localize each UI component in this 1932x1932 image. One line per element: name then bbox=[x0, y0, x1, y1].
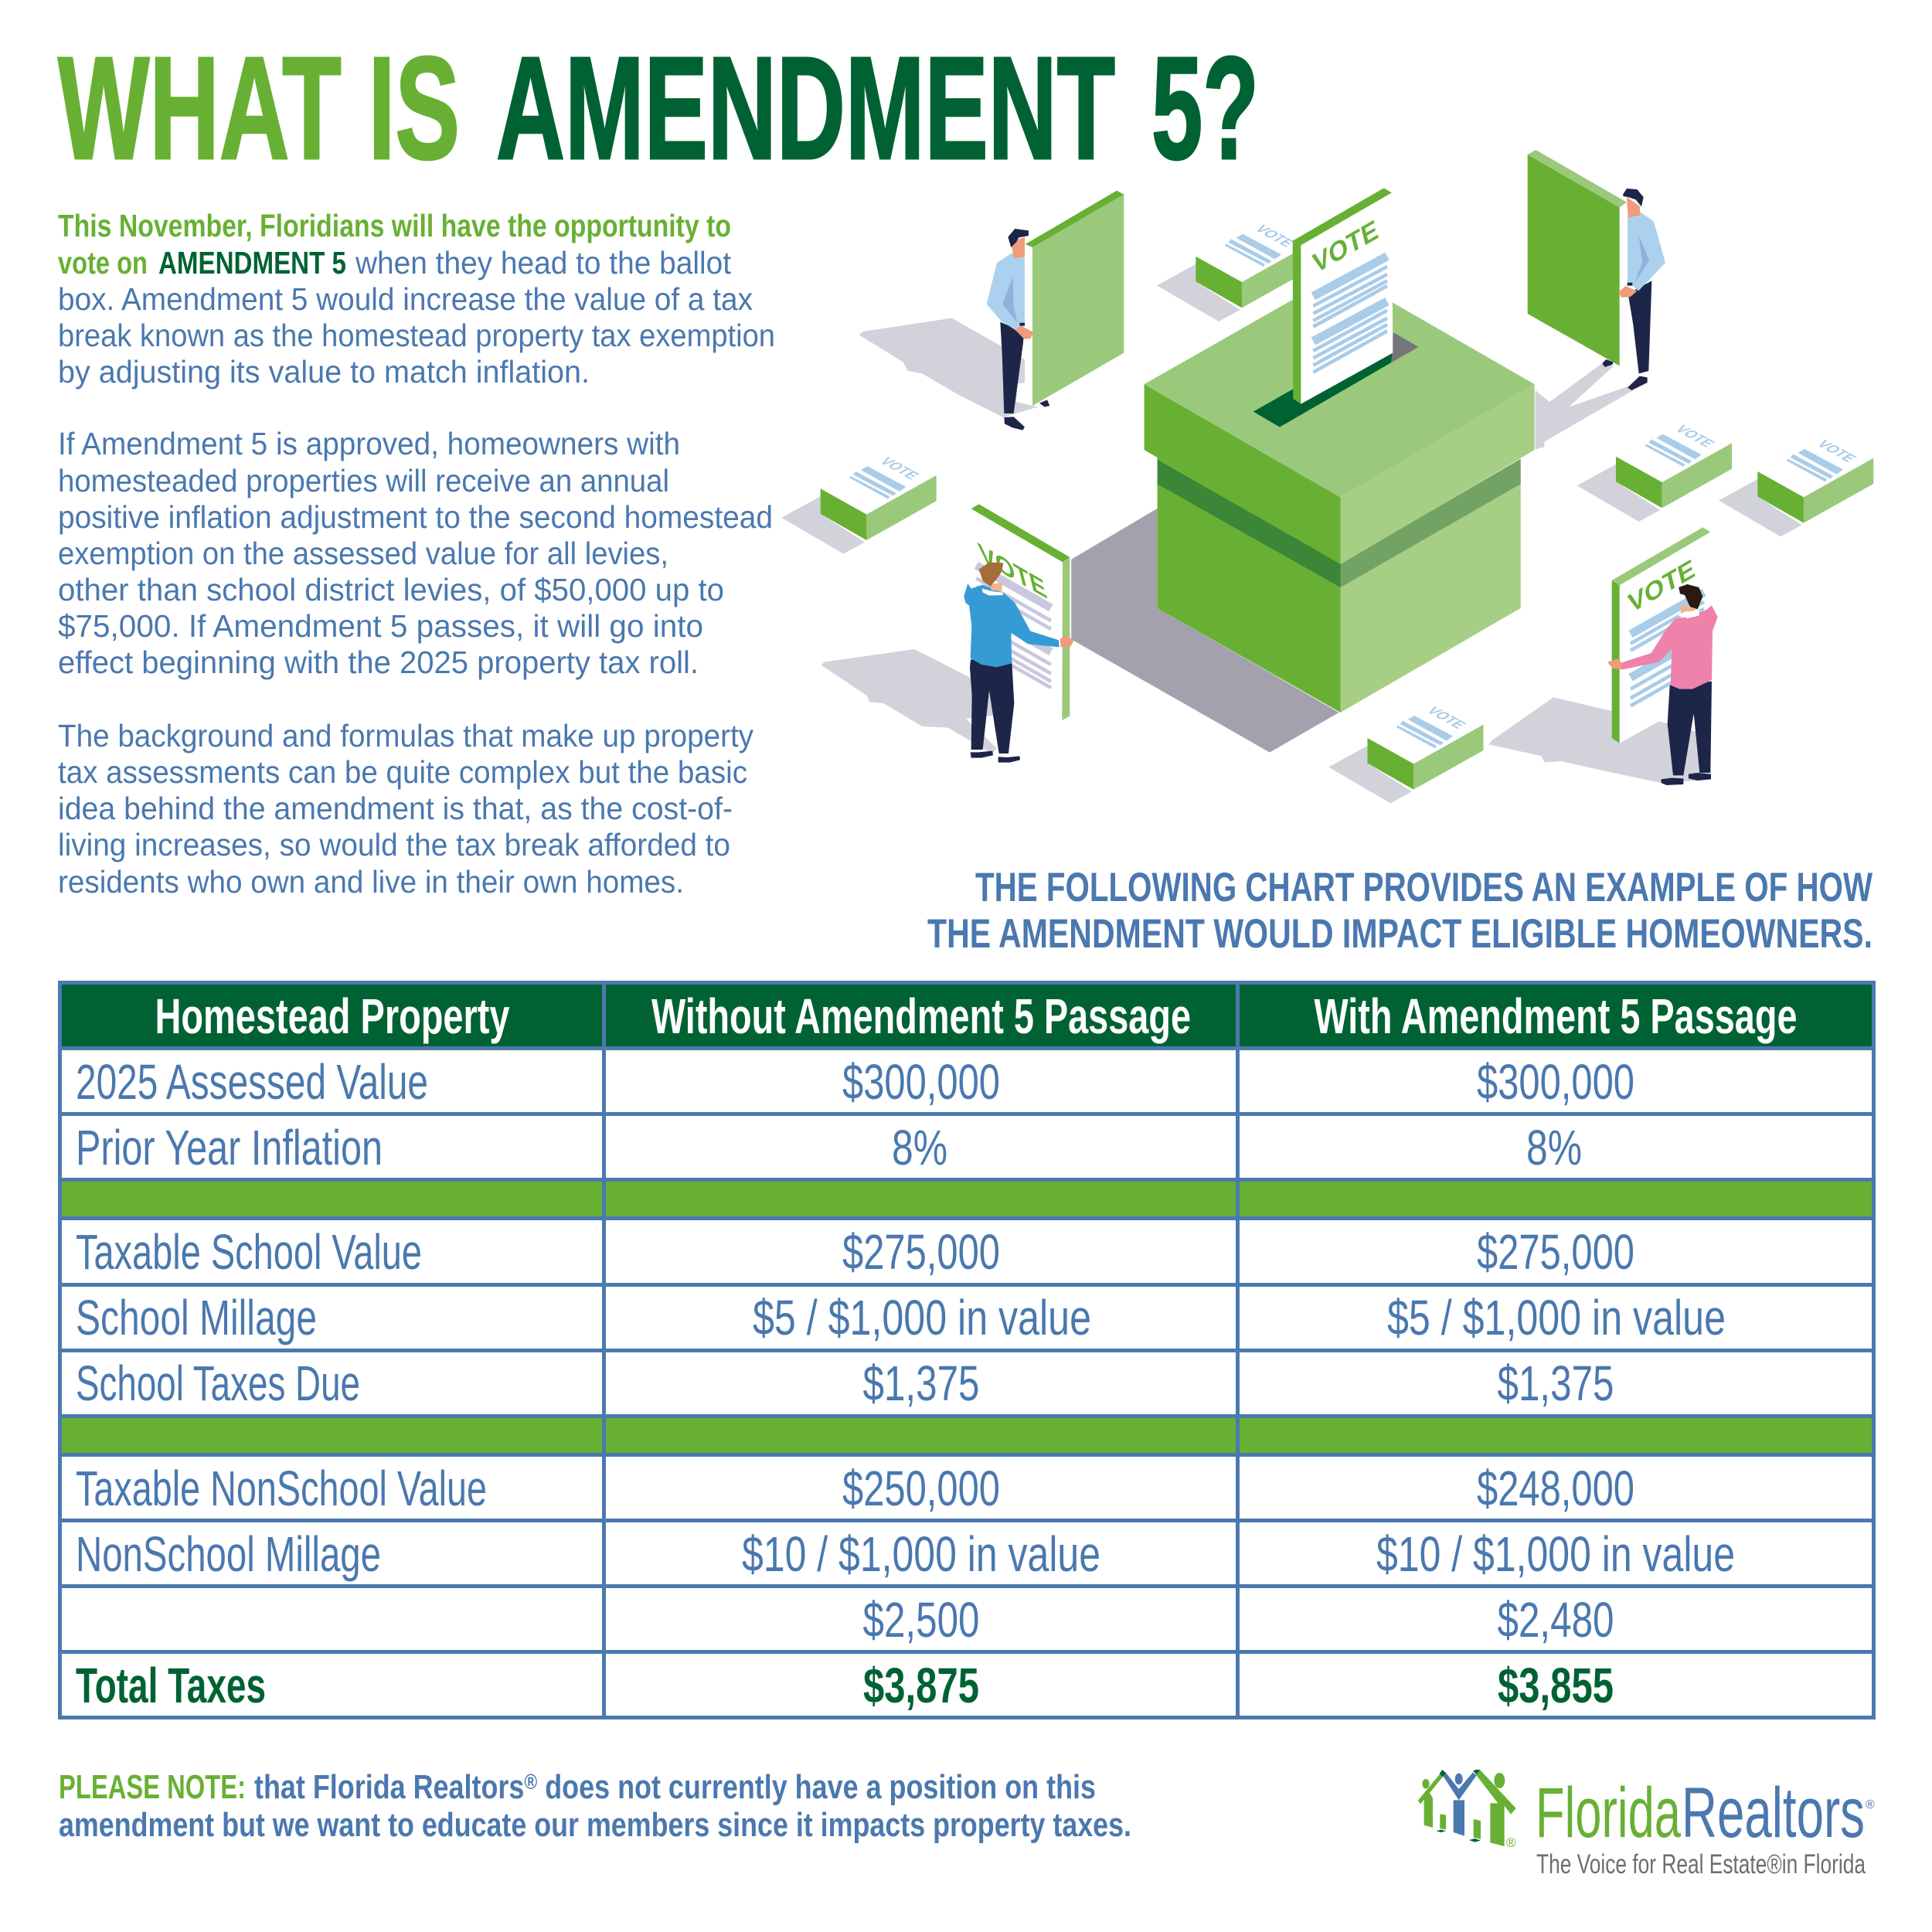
text block: second paragraph: homesteaded properties will receive an annual bbox=[58, 463, 669, 498]
title: AMENDMENT bbox=[496, 27, 1115, 190]
ballot stack, right 1 bbox=[1577, 417, 1732, 522]
footer note: ® bbox=[524, 1770, 538, 1794]
text block: intro paragraph bbox=[58, 208, 775, 389]
footer note bbox=[59, 1768, 1131, 1844]
table grid lines bbox=[58, 981, 1876, 1719]
text block: intro paragraph: break known as the homestead property tax exemption bbox=[58, 318, 775, 353]
row: nonschool taxes: $2,480 bbox=[1498, 1592, 1614, 1648]
title bbox=[58, 27, 1259, 190]
logo icon: houses and people bbox=[1418, 1770, 1516, 1846]
text block: intro paragraph: This November, Floridians will have the opportunity to bbox=[58, 208, 731, 243]
text block: second paragraph: exemption on the assessed value for all levies, bbox=[58, 536, 668, 571]
ballot paper entering slot bbox=[1253, 188, 1419, 427]
ballot stack, left bbox=[781, 450, 937, 554]
row: 2025 assessed value: $300,000 bbox=[842, 1054, 1000, 1110]
row: taxable nonschool value bbox=[76, 1461, 1634, 1516]
text block: intro paragraph: when they head to the ballot bbox=[355, 245, 732, 281]
row: nonschool millage bbox=[76, 1526, 1735, 1582]
logo wordmark: Florida bbox=[1536, 1774, 1682, 1852]
row: school millage: $5 / $1,000 in value bbox=[1387, 1290, 1726, 1345]
person with blank ballot, top right bbox=[1528, 150, 1665, 390]
row: school millage: $5 / $1,000 in value bbox=[753, 1290, 1091, 1345]
row: taxable school value: $275,000 bbox=[1477, 1224, 1634, 1280]
title: 5? bbox=[1151, 27, 1259, 190]
text block: intro paragraph: AMENDMENT 5 bbox=[158, 245, 346, 281]
row: taxable nonschool value: $250,000 bbox=[842, 1461, 1000, 1516]
row: total taxes: $3,855 bbox=[1498, 1658, 1614, 1713]
text block: second paragraph: effect beginning with the 2025 property tax roll. bbox=[58, 645, 699, 680]
ballot stack, top centre: VOTE bbox=[1251, 223, 1298, 250]
logo: Florida Realtors bbox=[1418, 1770, 1875, 1879]
ballot stack, right 1: VOTE bbox=[1671, 423, 1718, 450]
text block: third paragraph: idea behind the amendment is that, as the cost-of- bbox=[58, 791, 733, 826]
text block: third paragraph bbox=[58, 718, 753, 900]
ballot paper entering slot: VOTE bbox=[1310, 214, 1381, 280]
ballot stack, bottom bbox=[1328, 699, 1483, 803]
heading: chart intro bbox=[927, 865, 1872, 957]
text block: intro paragraph: by adjusting its value to match inflation. bbox=[58, 354, 590, 389]
illustration: voting scene bbox=[781, 150, 1873, 803]
row: nonschool millage: $10 / $1,000 in value bbox=[742, 1526, 1100, 1582]
text block: second paragraph: $75,000. If Amendment 5 passes, it will go into bbox=[58, 608, 703, 644]
row: school millage: School Millage bbox=[76, 1290, 317, 1345]
row: taxable school value: $275,000 bbox=[842, 1224, 1000, 1280]
table header row: Without Amendment 5 Passage bbox=[651, 988, 1191, 1044]
row: prior year inflation: Prior Year Inflation bbox=[76, 1120, 383, 1175]
logo icon registered mark: ® bbox=[1506, 1835, 1516, 1850]
text block: intro paragraph: vote on bbox=[58, 245, 148, 281]
ballot box floor shadow bbox=[1071, 509, 1339, 753]
person with blank ballot, top left bbox=[859, 191, 1124, 430]
person reading ballot in blue shirt: VOTE bbox=[975, 537, 1050, 605]
ballot box bbox=[1145, 273, 1535, 713]
row: total taxes bbox=[76, 1658, 1614, 1713]
row: taxable school value bbox=[76, 1224, 1634, 1280]
text block: third paragraph: living increases, so would the tax break afforded to bbox=[58, 827, 730, 862]
text block: third paragraph: tax assessments can be quite complex but the basic bbox=[58, 754, 747, 790]
row: total taxes: Total Taxes bbox=[76, 1658, 266, 1713]
ballot stack, left: VOTE bbox=[876, 455, 923, 481]
row: nonschool taxes bbox=[862, 1592, 1614, 1648]
ballot stack, bottom: VOTE bbox=[1423, 705, 1470, 731]
row: nonschool taxes: $2,500 bbox=[862, 1592, 980, 1648]
text block: second paragraph: other than school district levies, of $50,000 up to bbox=[58, 572, 724, 607]
row: school taxes due: $1,375 bbox=[1498, 1355, 1614, 1411]
row: school taxes due bbox=[76, 1355, 1614, 1411]
ballot stack, right 2: VOTE bbox=[1813, 438, 1859, 464]
person top right: floor shadow bbox=[1536, 363, 1633, 450]
row: school taxes due: $1,375 bbox=[862, 1355, 980, 1411]
text block: second paragraph: positive inflation adjustment to the second homestead bbox=[58, 499, 773, 535]
person reading ballot in blue shirt bbox=[821, 504, 1074, 763]
text block: third paragraph: The background and formulas that make up property bbox=[58, 718, 753, 753]
table header row: Homestead Property bbox=[155, 988, 510, 1044]
row: nonschool millage: NonSchool Millage bbox=[76, 1526, 381, 1582]
green divider row 1 bbox=[58, 1180, 1876, 1219]
ballot stack, top centre bbox=[1157, 217, 1311, 321]
ballot stack, right 2 bbox=[1719, 432, 1873, 536]
footer note: that Florida Realtors bbox=[254, 1768, 585, 1806]
row: taxable nonschool value: $248,000 bbox=[1477, 1461, 1634, 1516]
row: prior year inflation bbox=[76, 1120, 1582, 1175]
green divider row 2 bbox=[58, 1416, 1876, 1454]
row: 2025 assessed value: 2025 Assessed Value bbox=[76, 1054, 428, 1110]
row: school millage bbox=[76, 1290, 1726, 1345]
table header row bbox=[155, 988, 1798, 1044]
row: total taxes: $3,875 bbox=[863, 1658, 979, 1713]
row: taxable school value: Taxable School Value bbox=[76, 1224, 422, 1280]
footer note: amendment but we want to educate our members since it impacts property taxes. bbox=[59, 1806, 1131, 1844]
person reading ballot in pink shirt bbox=[1489, 527, 1718, 785]
table header fill bbox=[58, 981, 1876, 1050]
text block: intro paragraph: box. Amendment 5 would increase the value of a tax bbox=[58, 281, 753, 317]
footer note: PLEASE NOTE: bbox=[59, 1768, 246, 1806]
row: school taxes due: School Taxes Due bbox=[76, 1355, 360, 1411]
text block: third paragraph: residents who own and live in their own homes. bbox=[58, 864, 684, 900]
row: nonschool millage: $10 / $1,000 in value bbox=[1376, 1526, 1735, 1582]
text block: second paragraph bbox=[58, 426, 773, 680]
logo registered mark: ® bbox=[1866, 1798, 1875, 1811]
person reading ballot in pink shirt: VOTE bbox=[1626, 553, 1698, 618]
row: taxable nonschool value: Taxable NonSchool Value bbox=[76, 1461, 487, 1516]
title: WHAT IS bbox=[58, 27, 460, 190]
row: 2025 assessed value bbox=[76, 1054, 1634, 1110]
row: 2025 assessed value: $300,000 bbox=[1477, 1054, 1634, 1110]
row: prior year inflation: 8% bbox=[892, 1120, 947, 1175]
text block: second paragraph: If Amendment 5 is approved, homeowners with bbox=[58, 426, 680, 461]
footer note: does not currently have a position on this bbox=[537, 1768, 1096, 1806]
table: homestead property comparison bbox=[58, 981, 1876, 1719]
row: prior year inflation: 8% bbox=[1526, 1120, 1582, 1175]
